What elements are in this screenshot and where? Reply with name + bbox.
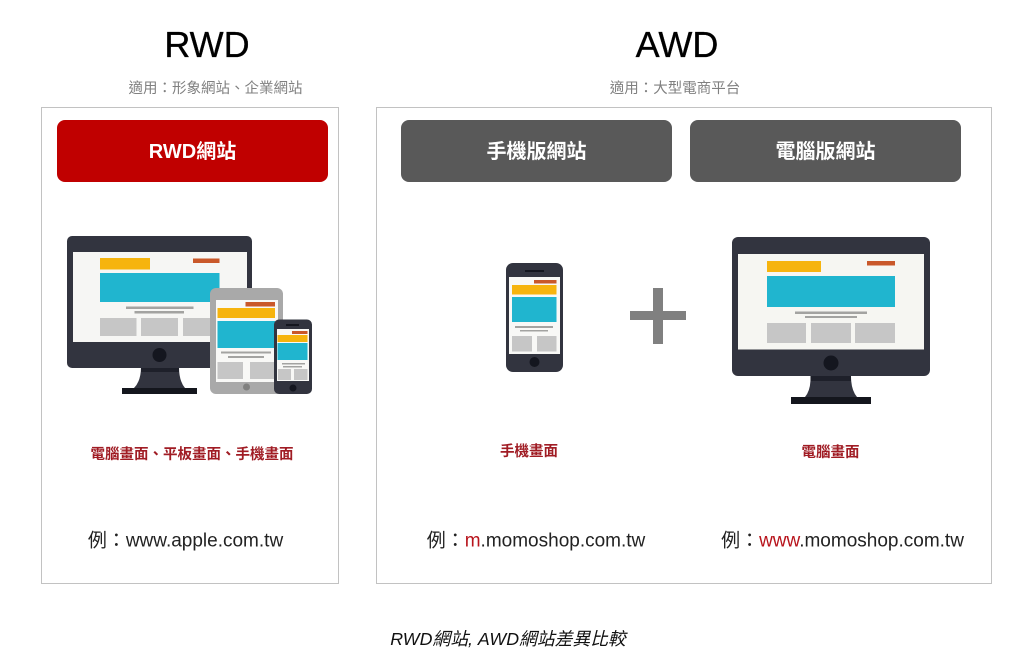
button: mobile site: 手機版網站 (486, 141, 586, 163)
button: mobile site (401, 120, 672, 182)
label: RWD screens: 電腦畫面、平板畫面、手機畫面 (90, 447, 294, 463)
label: desktop screen: 電腦畫面 (802, 444, 860, 460)
example: apple: 例：www.apple.com.tw (88, 530, 283, 552)
example: desktop momo: 例：www.momoshop.com.tw (721, 530, 964, 552)
button: desktop site (690, 120, 961, 182)
icon: AWD desktop monitor (732, 237, 930, 404)
icon: RWD phone (274, 320, 312, 394)
heading: AWD: AWD (636, 24, 718, 65)
icon: RWD tablet (210, 288, 283, 394)
panel: RWD frame (41, 107, 339, 584)
panel: AWD frame (376, 107, 992, 584)
icon: plus sign (630, 288, 686, 344)
example: mobile momo: 例：m.momoshop.com.tw (427, 530, 645, 552)
heading: RWD: RWD (164, 24, 250, 65)
label: mobile screen: 手機畫面 (500, 443, 558, 459)
button: RWD site (57, 120, 328, 182)
icon: AWD phone (506, 263, 563, 372)
text: RWD usage: 適用：形象網站、企業網站 (128, 80, 302, 96)
button: RWD site: RWD網站 (149, 141, 236, 163)
text: AWD usage: 適用：大型電商平台 (610, 80, 740, 96)
caption: RWD網站, AWD網站差異比較 (390, 629, 626, 649)
icon: RWD desktop monitor (67, 236, 252, 394)
button: desktop site: 電腦版網站 (776, 141, 876, 163)
